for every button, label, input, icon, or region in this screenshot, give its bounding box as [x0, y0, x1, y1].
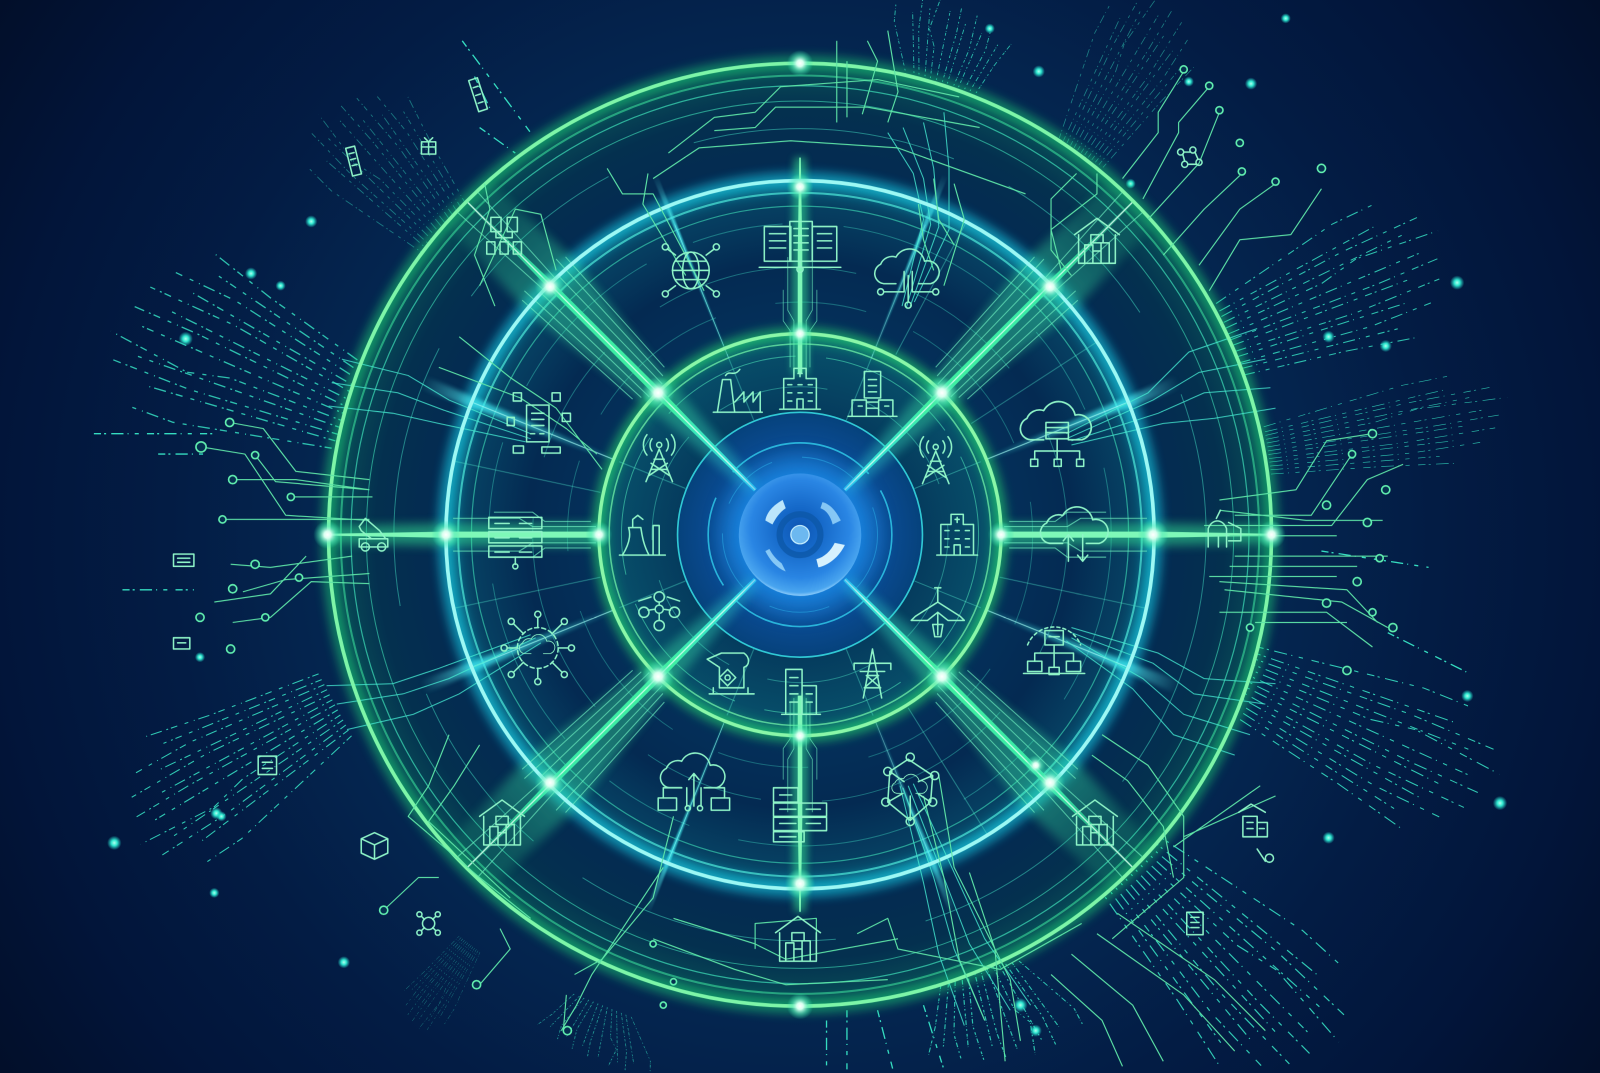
- outer green ring glow: [329, 63, 1271, 1006]
- icon: server list bottom: [773, 788, 827, 842]
- icon: factory: [713, 369, 762, 412]
- icon: central server block: [759, 221, 841, 272]
- green ring glow: [599, 334, 1001, 736]
- icon: machinery right: [1208, 510, 1241, 547]
- icon: cloud circuit: [875, 249, 939, 308]
- icon: cloud up/down arrows: [1040, 507, 1108, 561]
- circuit traces: top band: [439, 31, 1097, 469]
- icon: cluster lower left: [417, 912, 440, 935]
- icon: warehouse lower right: [1072, 800, 1117, 845]
- icon: hospital: [780, 368, 820, 409]
- icon: chip left exterior: [173, 554, 194, 566]
- central sphere: [739, 473, 861, 596]
- icon: cooling towers: [619, 515, 665, 555]
- icon: warehouse upper right: [1074, 218, 1119, 263]
- icon: data block upper left: [487, 217, 521, 254]
- icon: gift node upper left: [421, 138, 436, 154]
- right circuit traces with nodes: [1204, 430, 1403, 675]
- diagonal light beams: [442, 177, 1158, 893]
- icon: node block lower left exterior: [258, 756, 277, 775]
- icon: antenna tower right: [920, 437, 952, 484]
- icon: hospital right: [937, 514, 978, 555]
- icon: chip left lower exterior: [173, 638, 190, 649]
- icon: machinery left: [359, 518, 388, 551]
- icon: dashed network tree: [1023, 627, 1085, 675]
- crisp ring strokes: [329, 63, 1271, 1006]
- icon: globe network: [662, 244, 719, 297]
- icon: tower blocks: [782, 669, 820, 714]
- icon: cloud hub lower right: [882, 753, 939, 826]
- icon: server rack left: [489, 517, 542, 569]
- icon: warehouse lower left: [480, 800, 524, 845]
- icon: power pylon: [854, 649, 891, 698]
- cyan ring glow: [446, 181, 1154, 889]
- icon: storage plant: [707, 653, 754, 694]
- icon: crate lower left exterior: [361, 833, 388, 859]
- axis light beams: [329, 158, 1271, 912]
- icon: cloud with devices: [658, 753, 730, 811]
- icon: drone: [911, 588, 964, 637]
- lower-left circuit traces with nodes: [380, 867, 677, 1035]
- icon: cluster upper right: [1178, 147, 1202, 167]
- cyan side rays: [409, 165, 1191, 924]
- icon: gear cluster: [639, 592, 680, 631]
- icon: cloud hub left: [501, 611, 574, 685]
- converging wire bundles: [327, 112, 1276, 1026]
- icon: warehouse bottom: [776, 916, 820, 961]
- main disc: [329, 63, 1271, 1006]
- icon: building complex: [848, 371, 897, 416]
- concentric thin rings: [341, 76, 1259, 994]
- icon: module lower right exterior: [1187, 912, 1203, 935]
- icon: cloud network right: [1020, 402, 1091, 466]
- upper-right circuit traces with nodes: [1122, 66, 1326, 291]
- icon: antenna tower left: [643, 435, 675, 482]
- icon: mobile document: [507, 393, 570, 453]
- circuit traces: bottom band: [408, 735, 1276, 1066]
- icon: chip top exterior: [469, 78, 487, 112]
- icon: chip upper left exterior: [346, 146, 361, 176]
- central sphere glow: [727, 461, 873, 608]
- bright junction nodes: [313, 50, 1286, 1019]
- left circuit traces with nodes: [196, 418, 372, 653]
- radial spokes: [454, 206, 1146, 863]
- icon: small building lower right exterior: [1239, 804, 1273, 862]
